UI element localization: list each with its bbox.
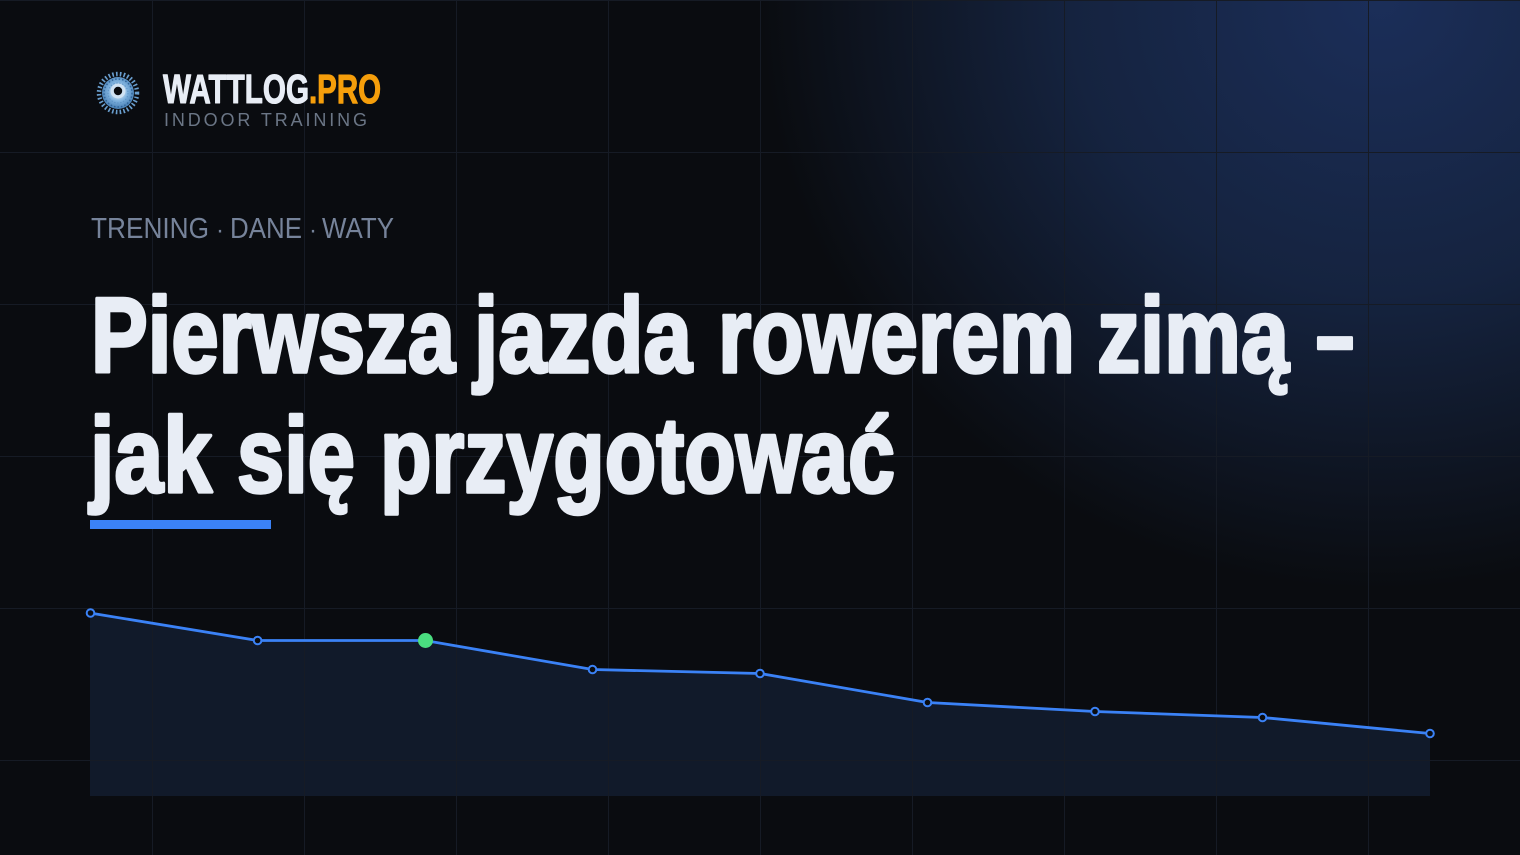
line chart (87, 609, 1434, 737)
eyebrow: · (309, 217, 317, 244)
title: przygotować (380, 395, 895, 515)
title: jazda (472, 275, 693, 395)
eyebrow: TRENING (91, 213, 209, 245)
title: jak (88, 395, 212, 515)
title: zimą (1097, 275, 1290, 395)
eyebrow (91, 213, 394, 245)
eyebrow: DANE (230, 213, 302, 245)
title: Pierwsza (91, 275, 456, 395)
title: rowerem (718, 275, 1075, 395)
logo wordmark: WATTLOG (163, 66, 309, 112)
title (88, 275, 1354, 515)
chart line (90, 613, 1430, 734)
chart points (87, 609, 1434, 737)
logo tagline: INDOOR TRAINING (164, 110, 367, 130)
title: się (237, 395, 355, 515)
title: – (1316, 275, 1354, 395)
title accent underline (90, 520, 271, 529)
logo wordmark: .PRO (309, 66, 381, 112)
chart area (90, 613, 1430, 796)
highlighted point (418, 633, 433, 648)
eyebrow: · (216, 217, 224, 244)
logo: cassette icon (99, 74, 137, 112)
eyebrow: WATY (322, 213, 394, 245)
